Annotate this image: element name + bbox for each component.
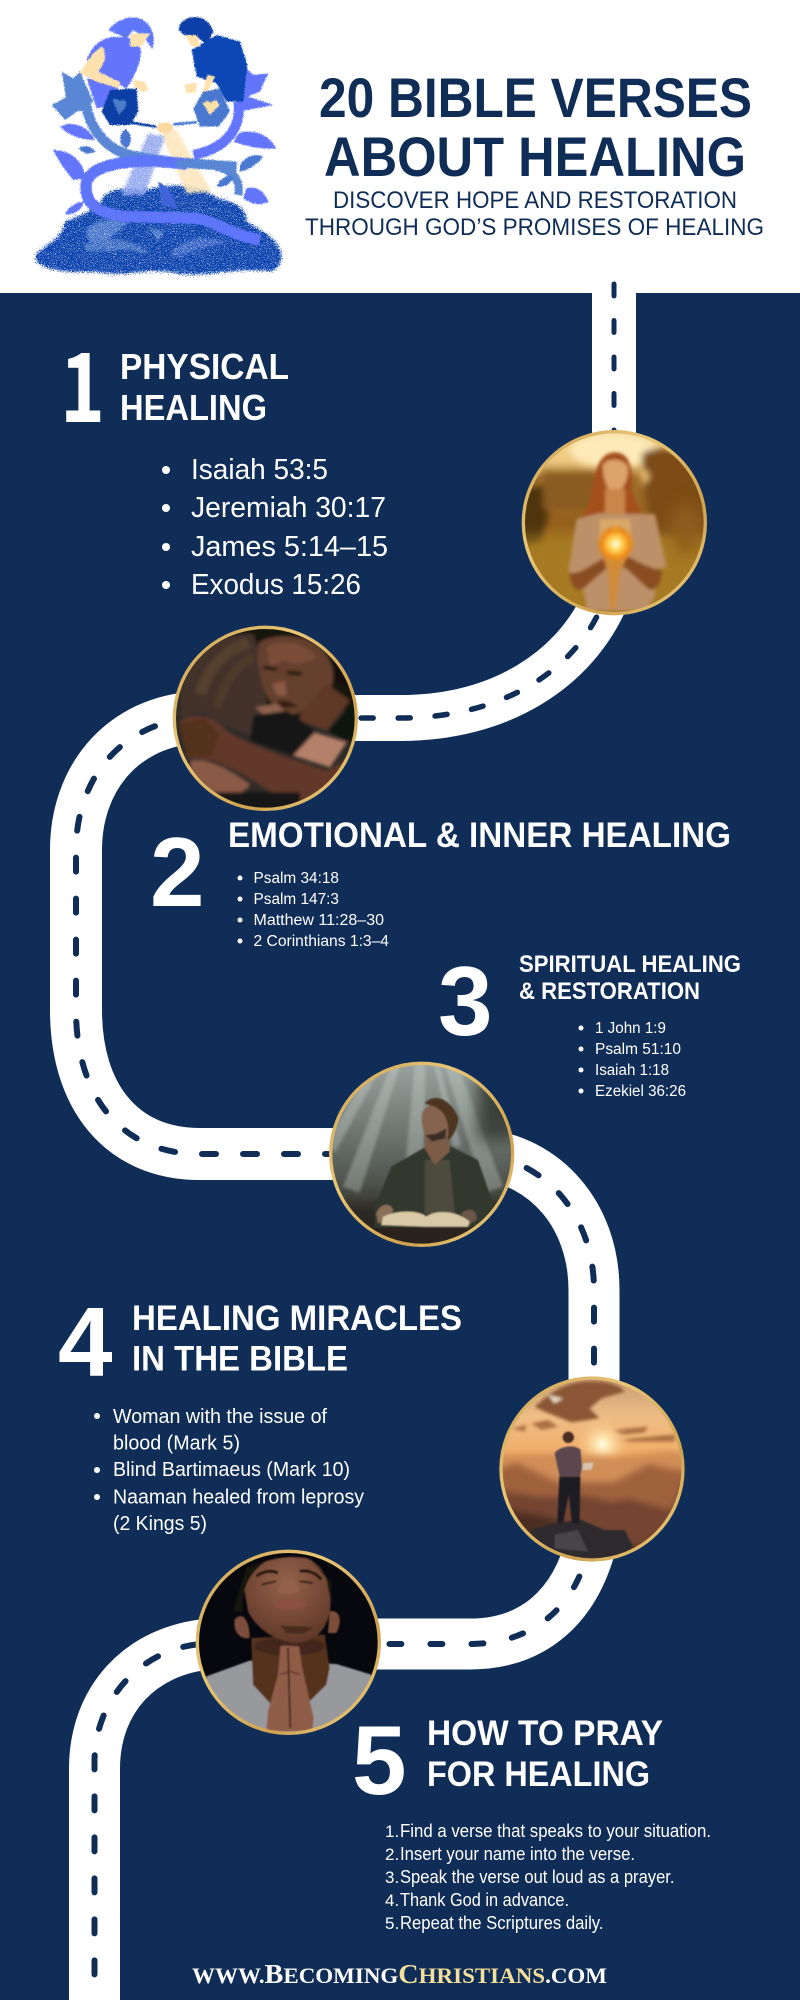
- heading: & RESTORATION: [519, 978, 700, 1005]
- road segment: circle 5 to bottom: [94, 1644, 288, 2000]
- title: [319, 66, 752, 188]
- left person: [80, 17, 156, 127]
- prayer steps: 3.: [385, 1868, 399, 1887]
- mountains: [498, 1451, 688, 1565]
- verse list: Psalm 147:3: [254, 891, 339, 908]
- subtitle: [305, 187, 764, 241]
- photo 5: man praying with closed eyes: [193, 1548, 383, 1738]
- number 5: 5: [352, 1705, 407, 1815]
- photo 1: woman with glowing hands: [520, 429, 710, 619]
- verse list: James 5:14–15: [191, 531, 388, 563]
- right person: [173, 17, 247, 127]
- verse list: Psalm 51:10: [595, 1041, 681, 1058]
- hair and face: [232, 629, 354, 719]
- verse list: Ezekiel 36:26: [595, 1083, 686, 1100]
- arm: [179, 714, 346, 802]
- verse list: [578, 1020, 686, 1100]
- spout splash: [157, 122, 173, 133]
- footer website: WWW.BECOMINGCHRISTIANS.COM: [192, 1959, 607, 1989]
- number 2: 2: [150, 817, 205, 927]
- heading: [120, 346, 289, 428]
- verse list: Matthew 11:28–30: [254, 912, 384, 929]
- prayer steps: 1.: [385, 1822, 399, 1841]
- section 2: emotional and inner healing: [150, 816, 731, 950]
- photo 3: man reading bible under rays of light: [328, 1060, 518, 1250]
- glowing hands: [596, 525, 635, 562]
- miracle list: [94, 1406, 364, 1535]
- road segment: circle 2 to circle 3: [76, 718, 422, 1154]
- miracle list: (2 Kings 5): [113, 1513, 207, 1535]
- verse list: Isaiah 53:5: [191, 454, 328, 486]
- prayer steps: Repeat the Scriptures daily.: [400, 1913, 604, 1933]
- hands: [266, 1646, 314, 1731]
- forearm light skin: [293, 732, 347, 767]
- verse list: Jeremiah 30:17: [191, 492, 386, 524]
- road segment: circle 1 to circle 2: [265, 598, 606, 718]
- vines and leaves: [52, 68, 276, 240]
- verse list: Exodus 15:26: [191, 569, 361, 601]
- section 5: how to pray for healing: [352, 1705, 711, 1933]
- shirt: [206, 1661, 371, 1735]
- man: [374, 1097, 492, 1228]
- heading: HEALING MIRACLES: [132, 1299, 462, 1338]
- road segment: top to circle 1: [592, 275, 636, 530]
- heading: PHYSICAL: [120, 346, 289, 387]
- silhouette: [555, 1432, 594, 1523]
- heading: SPIRITUAL HEALING: [519, 951, 741, 978]
- neck: [251, 1635, 330, 1705]
- heading: IN THE BIBLE: [132, 1340, 348, 1378]
- verse list: [162, 454, 388, 601]
- heading: EMOTIONAL & INNER HEALING: [228, 816, 731, 855]
- prayer steps: Insert your name into the verse.: [400, 1844, 635, 1864]
- rocks: [530, 1520, 633, 1558]
- miracle list: Blind Bartimaeus (Mark 10): [113, 1459, 350, 1481]
- number 3: 3: [438, 946, 493, 1056]
- road segment: circle 3 to circle 4: [422, 1154, 594, 1469]
- winding road: [76, 275, 614, 2000]
- heading: HEALING: [120, 387, 267, 428]
- black tops: [250, 711, 315, 756]
- verse list: Isaiah 1:18: [595, 1062, 669, 1079]
- clouds: [511, 1381, 675, 1442]
- prayer steps: [385, 1821, 711, 1933]
- title: 20 BIBLE VERSES: [319, 66, 752, 129]
- prayer steps: Find a verse that speaks to your situation.: [400, 1821, 711, 1841]
- illustration: two people watering a vine: [35, 17, 282, 275]
- photo 4: man on mountain at sunset: [498, 1375, 688, 1565]
- heading: [519, 951, 741, 1005]
- prayer steps: 4.: [385, 1891, 399, 1910]
- prayer steps: 5.: [385, 1914, 399, 1933]
- miracle list: blood (Mark 5): [113, 1432, 240, 1454]
- ears: [234, 1611, 340, 1638]
- subtitle: DISCOVER HOPE AND RESTORATION: [333, 187, 737, 214]
- sun: [581, 1425, 626, 1458]
- water streams: [122, 127, 212, 195]
- verse list: 1 John 1:9: [595, 1020, 666, 1037]
- heading: [427, 1714, 663, 1794]
- woman: [568, 452, 667, 611]
- heading: FOR HEALING: [427, 1755, 650, 1794]
- subtitle: THROUGH GOD’S PROMISES OF HEALING: [305, 214, 764, 241]
- light rays: [332, 1065, 504, 1194]
- soil mound: [35, 186, 282, 275]
- road segment: circle 4 to circle 5: [288, 1469, 592, 1644]
- verse list: [238, 870, 389, 950]
- number 1: 1: [60, 311, 105, 450]
- head: [243, 1557, 330, 1643]
- prayer steps: Speak the verse out loud as a prayer.: [400, 1867, 674, 1887]
- miracle list: Naaman healed from leprosy: [113, 1486, 364, 1508]
- sky glow and trees: [520, 434, 707, 546]
- verse list: 2 Corinthians 1:3–4: [254, 933, 389, 950]
- miracle list: Woman with the issue of: [113, 1406, 327, 1428]
- section 4: healing miracles in the bible: [58, 1287, 462, 1535]
- section 1: physical healing: [60, 311, 388, 601]
- title: ABOUT HEALING: [324, 125, 746, 188]
- verse list: Psalm 34:18: [254, 870, 339, 887]
- heading: [132, 1299, 462, 1378]
- heading: HOW TO PRAY: [427, 1714, 663, 1753]
- prayer steps: Thank God in advance.: [400, 1890, 569, 1910]
- prayer steps: 2.: [385, 1845, 399, 1864]
- photo 2: two people embracing: [170, 624, 360, 814]
- section 3: spiritual healing and restoration: [438, 946, 741, 1100]
- number 4: 4: [58, 1287, 113, 1397]
